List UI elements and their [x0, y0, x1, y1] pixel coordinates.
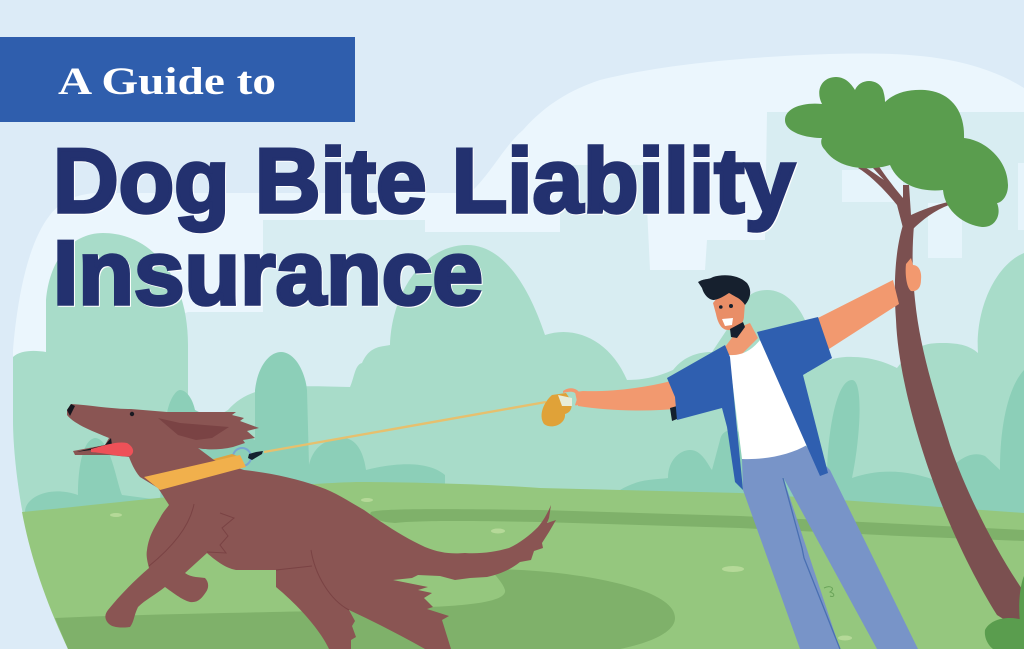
tree	[785, 77, 1024, 632]
man hair	[698, 275, 750, 305]
reel opening	[558, 395, 572, 406]
grass	[22, 482, 1024, 649]
title	[53, 131, 795, 324]
man left arm	[575, 380, 685, 410]
man neck	[725, 323, 758, 356]
man hand on tree	[906, 258, 921, 291]
dog nose	[67, 404, 75, 416]
dog collar back	[210, 454, 240, 466]
man hand on reel	[563, 388, 581, 405]
man blue shirt right	[757, 317, 832, 476]
dog fur lines	[149, 504, 349, 610]
grass curl	[824, 587, 834, 597]
dog ear	[158, 418, 229, 440]
dog body	[67, 404, 556, 649]
bush: bottom right	[985, 576, 1024, 649]
dog collar	[144, 455, 246, 490]
scene: lawn	[22, 482, 1024, 649]
tree crown	[785, 77, 1008, 227]
dog leash	[264, 402, 546, 452]
banner	[0, 37, 355, 122]
dog eye	[130, 412, 134, 416]
dark grass stripe	[370, 509, 1024, 541]
title line one: Dog Bite Liability	[53, 131, 795, 232]
dog	[67, 404, 556, 649]
tree trunk	[895, 222, 1024, 632]
leash clip	[248, 451, 263, 460]
man blue shirt left	[667, 345, 743, 490]
man white t-shirt	[729, 340, 807, 459]
title line two: Insurance	[53, 223, 483, 324]
man eyes	[719, 304, 733, 309]
scene: sky and bushes	[13, 53, 1024, 520]
light green bushes	[13, 233, 1024, 520]
man beard	[730, 322, 745, 338]
darker green bushes	[25, 352, 1024, 520]
dog tongue	[91, 442, 133, 456]
leash reel	[542, 393, 572, 426]
pale cloud shape	[13, 53, 1024, 520]
sleeve cuff	[670, 406, 677, 421]
dog collar ring	[233, 448, 251, 466]
grass spots	[110, 498, 852, 640]
dog mouth	[76, 438, 112, 452]
pale skyline blocks	[842, 163, 1024, 258]
man arm gripping tree	[810, 280, 899, 358]
dark grass patch	[55, 569, 675, 649]
man mouth	[722, 318, 733, 326]
man face	[713, 292, 745, 330]
trouser seam	[783, 478, 840, 649]
sky with skyline	[13, 112, 1024, 520]
man	[542, 258, 921, 649]
banner text: A Guide to	[58, 60, 276, 103]
tree branches	[858, 165, 949, 230]
man trousers	[742, 445, 918, 649]
